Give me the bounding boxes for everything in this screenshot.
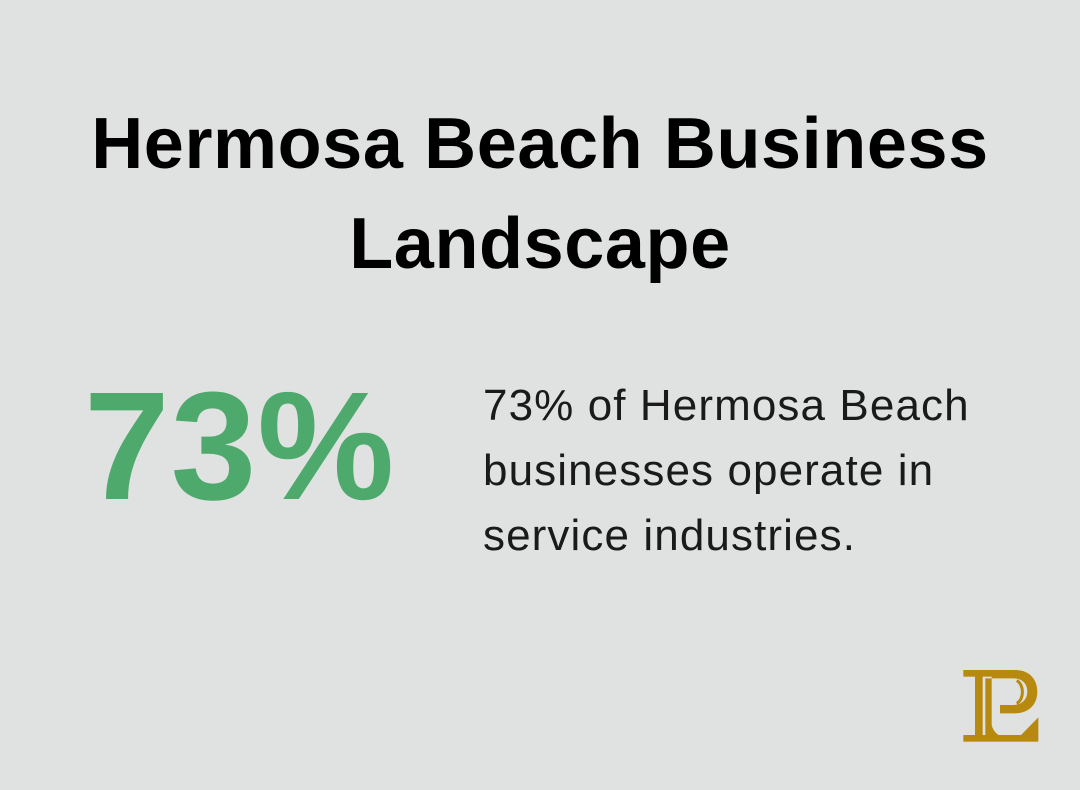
description: 73% of Hermosa Beach: [483, 381, 970, 430]
icon: logo: [963, 670, 1038, 742]
description: businesses operate in: [483, 446, 934, 495]
big stat: 73%: [84, 360, 395, 532]
title: Hermosa Beach Business: [91, 104, 989, 184]
title: Landscape: [349, 204, 731, 284]
title: [91, 104, 989, 284]
description: [483, 381, 970, 560]
description: service industries.: [483, 511, 856, 560]
